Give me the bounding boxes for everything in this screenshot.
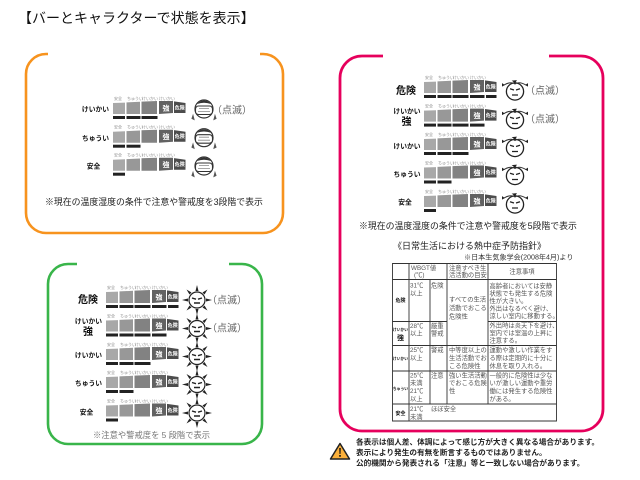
warning notes (356, 436, 599, 468)
row: ちゅうい: ちゅうい (393, 170, 421, 178)
row: 安全: 安全 (398, 198, 412, 206)
row: けいかい強: 強 (83, 326, 93, 338)
row: けいかい: 危険 (175, 104, 185, 112)
row: けいかい: けいかい (142, 95, 158, 101)
table row: ちゅうい: 25℃ (410, 372, 424, 380)
row: 安全: けいかい (159, 152, 175, 158)
row: ちゅうい: ちゅうい (82, 134, 109, 142)
table row: 安全: 21℃ (410, 405, 424, 413)
table row: けいかい: けいかい (393, 356, 408, 361)
table header: 注意すべき生 (449, 263, 486, 272)
row: けいかい: 安全 (425, 131, 433, 137)
table row: けいかい: こる危険性 (449, 361, 480, 370)
row: 危険: けいかい (152, 284, 168, 290)
row: ちゅうい: 危険 (175, 133, 185, 140)
table row: ちゅうい: いが激しい運動や重労 (490, 378, 552, 387)
table row: けいかい強: 注意する。 (490, 336, 521, 344)
row: ちゅうい: 強 (156, 378, 162, 386)
table row: 危険 (395, 280, 559, 320)
panel: five-level display, face and guideline (340, 56, 603, 431)
table row: けいかい: 休息を取り入れる。 (490, 361, 546, 370)
row: 危険: （点滅） (207, 294, 247, 306)
table row: 安全: 安全 (395, 410, 406, 417)
row: けいかい強 (75, 312, 247, 344)
table row: ちゅうい: 強い生活活動 (449, 370, 487, 380)
table header: 活活動の目安 (449, 270, 487, 279)
table row: ちゅうい (393, 370, 552, 403)
icon: warning triangle (330, 444, 350, 459)
warning notes: 表示により発生の有無を断言するものではありません。 (356, 447, 547, 457)
row: 危険: 安全 (107, 284, 115, 290)
row: 危険: 危険 (78, 293, 98, 306)
row: 安全: 強 (474, 196, 480, 206)
row: ちゅうい: ちゅうい (438, 160, 454, 166)
table header (411, 263, 535, 279)
row: けいかい強: 安全 (107, 312, 115, 318)
guideline source: ※日本生気象学会(2008年4月)より (464, 252, 573, 262)
row: けいかい強: 危険 (486, 112, 496, 119)
table row: ちゅうい: 未満 (410, 378, 423, 387)
row: けいかい: 危険 (168, 350, 178, 358)
row: ちゅうい: ちゅうい (127, 124, 143, 130)
table row: けいかい: 生活活動でお (449, 353, 487, 362)
row: ちゅうい (82, 124, 216, 148)
row: 安全: 安全 (107, 398, 115, 404)
row: けいかい強: （点滅） (525, 114, 565, 126)
table row: けいかい強: けいかい (393, 327, 408, 332)
row: ちゅうい: けいかい (470, 160, 486, 166)
row: ちゅうい: ちゅうい (120, 369, 136, 375)
row: 安全: けいかい (152, 398, 168, 404)
row: 安全: けいかい (453, 188, 469, 194)
table row: 危険: 涼しい室内に移動する。 (490, 311, 559, 320)
row: 安全: 安全 (114, 152, 122, 158)
row: けいかい強: （点滅） (207, 322, 247, 334)
row: けいかい強: 安全 (425, 103, 433, 109)
row: 危険: 危険 (396, 84, 416, 97)
table row: けいかい強: 以上 (410, 328, 423, 338)
table row: 危険: 危険 (431, 280, 444, 290)
row: けいかい強: 強 (156, 321, 162, 330)
row: 安全: 安全 (425, 188, 433, 194)
row: 安全: 危険 (168, 407, 178, 414)
row: ちゅうい: 安全 (107, 369, 115, 375)
row: けいかい: 安全 (114, 95, 122, 101)
row: 危険: けいかい (135, 284, 151, 290)
row: 安全: けいかい (135, 398, 151, 404)
caption: five levels: ※注意や警戒度を 5 段階で表示 (93, 430, 210, 440)
row: 安全: けいかい (470, 188, 486, 194)
row: 危険: 危険 (486, 84, 496, 90)
table row: けいかい強 (393, 320, 558, 344)
row: けいかい強: けいかい (453, 103, 469, 109)
caption: five levels: ※現在の温度湿度の条件で注意や警戒度を5段階で表示 (359, 220, 577, 231)
row: ちゅうい: けいかい (152, 369, 168, 375)
row: けいかい: 強 (474, 140, 480, 148)
row: けいかい: （点滅） (212, 104, 252, 116)
row: けいかい強: ちゅうい (438, 103, 454, 109)
table row: けいかい強: 28℃ (410, 322, 424, 330)
row: 危険: ちゅうい (120, 284, 136, 290)
guideline table (392, 263, 559, 421)
row: ちゅうい (75, 369, 212, 400)
row: 安全: 危険 (175, 161, 185, 168)
row: 安全: ちゅうい (120, 398, 136, 404)
row: けいかい: けいかい (393, 142, 421, 150)
row: けいかい強: けいかい (135, 312, 151, 318)
row: けいかい強: 強 (474, 111, 480, 120)
row: ちゅうい: けいかい (159, 124, 175, 130)
row: けいかい: けいかい (453, 131, 469, 137)
table row: けいかい: 警戒 (431, 345, 444, 354)
table row: ちゅうい: 21℃ (410, 387, 424, 395)
row: けいかい (75, 341, 212, 372)
row: 危険: 強 (156, 292, 162, 302)
table row: ちゅうい: ちゅうい (393, 386, 408, 391)
row: けいかい: 強 (162, 104, 170, 112)
guideline heading: 《日常生活における熱中症予防指針》 (393, 240, 546, 251)
row: けいかい: けいかい (152, 341, 168, 347)
row: 安全: 安全 (80, 408, 93, 416)
row: けいかい強: けいかい (470, 103, 486, 109)
table row: けいかい: 運動や激しい作業をす (490, 345, 552, 354)
row: 危険 (396, 74, 565, 100)
row: 安全: 強 (156, 406, 162, 415)
table row: けいかい強: 室内では室温の上昇に (490, 328, 552, 337)
table row: けいかい: 中等度以上の (449, 345, 487, 354)
row: 安全 (87, 152, 216, 176)
table row: けいかい: る際は定期的に十分に (490, 353, 552, 362)
row: ちゅうい: 強 (162, 132, 170, 141)
row: けいかい: けいかい (159, 95, 175, 101)
row: 危険: ちゅうい (438, 74, 454, 80)
table row: 安全: 未満 (410, 412, 423, 421)
row: 安全: ちゅうい (438, 188, 454, 194)
table row: けいかい強: 外出時は炎天下を避け、 (490, 320, 558, 330)
row: 安全 (80, 398, 212, 428)
warning notes: 公的機関から発表される「注意」等と一致しない場合があります。 (356, 458, 584, 468)
row: けいかい強: けいかい (393, 108, 421, 116)
row: ちゅうい: ちゅうい (75, 378, 102, 388)
row: けいかい: 強 (156, 350, 162, 358)
row: けいかい強: 危険 (168, 322, 178, 329)
table row: けいかい強: 強 (397, 333, 404, 342)
panel: five-level display, sun (48, 264, 262, 444)
row: 安全: けいかい (142, 152, 158, 158)
table row: ちゅうい: 以上 (410, 394, 423, 403)
row: 安全: ちゅうい (127, 152, 143, 158)
row: ちゅうい: 安全 (425, 160, 433, 166)
row: けいかい: 危険 (486, 140, 496, 148)
table row: 危険: 性が大きい。 (490, 296, 527, 305)
table row: 危険: 危険性 (449, 312, 468, 320)
row: 安全 (398, 188, 528, 213)
row: けいかい: ちゅうい (120, 341, 136, 347)
table row: 危険: 31℃ (410, 282, 424, 290)
row: ちゅうい: 強 (474, 168, 480, 177)
table row: 安全: ほぼ安全 (431, 404, 457, 413)
table header: (℃) (414, 271, 424, 279)
row: ちゅうい: けいかい (453, 160, 469, 166)
row: 危険 (78, 284, 247, 315)
table row: 安全 (395, 404, 457, 421)
table row: 危険: 状態でも発生する危険 (490, 288, 553, 298)
table row: ちゅうい: 一般的に危険性は少な (490, 370, 552, 380)
row: けいかい: けいかい (75, 352, 102, 360)
table row: ちゅうい: 働には発生する危険性 (490, 386, 552, 395)
row: 危険: 安全 (425, 74, 433, 80)
row: ちゅうい: 危険 (486, 169, 496, 176)
row: 危険: 危険 (168, 294, 178, 300)
table row: 危険: 危険 (395, 297, 406, 304)
row: けいかい強 (393, 103, 565, 129)
row: けいかい強: けいかい (75, 318, 102, 326)
table row: 危険: 高齢者においては安静 (490, 281, 553, 290)
row: ちゅうい: けいかい (135, 369, 151, 375)
caption: three levels: ※現在の温度湿度の条件で注意や警戒度を3段階で表示 (45, 196, 263, 207)
table row: 危険: 活動でおこる (449, 303, 487, 312)
table row: ちゅうい: でおこる危険 (449, 378, 487, 387)
row: けいかい: けいかい (135, 341, 151, 347)
row: ちゅうい: 危険 (168, 378, 178, 386)
row: けいかい強: 強 (402, 116, 412, 128)
row: 安全: 危険 (486, 198, 496, 204)
row: ちゅうい (393, 160, 528, 185)
table row: 危険: 外出はなるべく避け、 (490, 304, 552, 312)
table row: ちゅうい: がある。 (490, 394, 515, 403)
row: けいかい強: けいかい (152, 312, 168, 318)
table row: けいかい: 以上 (410, 353, 423, 362)
warning notes: 各表示は個人差、体調によって感じ方が大きく異なる場合があります。 (356, 436, 599, 446)
row: けいかい: ちゅうい (127, 95, 143, 101)
panel: three-level display (26, 54, 283, 233)
row: 安全: 安全 (87, 162, 100, 170)
table row: けいかい: 25℃ (410, 346, 424, 354)
row: けいかい: けいかい (470, 131, 486, 137)
row: けいかい (393, 131, 528, 157)
table row: ちゅうい: 性 (449, 386, 455, 395)
row: けいかい: けいかい (82, 106, 109, 114)
table row: けいかい (393, 345, 552, 370)
table header: 注意事項 (509, 266, 535, 276)
table row: ちゅうい: 注意 (431, 370, 444, 380)
table row: 危険: すべての生活 (449, 294, 487, 304)
row: ちゅうい: けいかい (142, 124, 158, 130)
table row: けいかい強: 厳重 (431, 321, 444, 330)
row: けいかい (82, 95, 252, 120)
row: 危険: けいかい (470, 74, 486, 80)
row: 危険: けいかい (453, 74, 469, 80)
table row: けいかい強: 警戒 (431, 328, 444, 338)
row: けいかい強: ちゅうい (120, 312, 136, 318)
title: 【バーとキャラクターで状態を表示】 (18, 10, 255, 26)
table row: 危険: 以上 (410, 288, 423, 298)
row: 危険: （点滅） (525, 85, 565, 97)
row: けいかい: 安全 (107, 341, 115, 347)
row: けいかい: ちゅうい (438, 131, 454, 137)
row: ちゅうい: 安全 (114, 124, 122, 130)
row: 安全: 強 (162, 160, 170, 169)
table header: WBGT値 (411, 263, 437, 272)
row: 危険: 強 (474, 82, 480, 92)
